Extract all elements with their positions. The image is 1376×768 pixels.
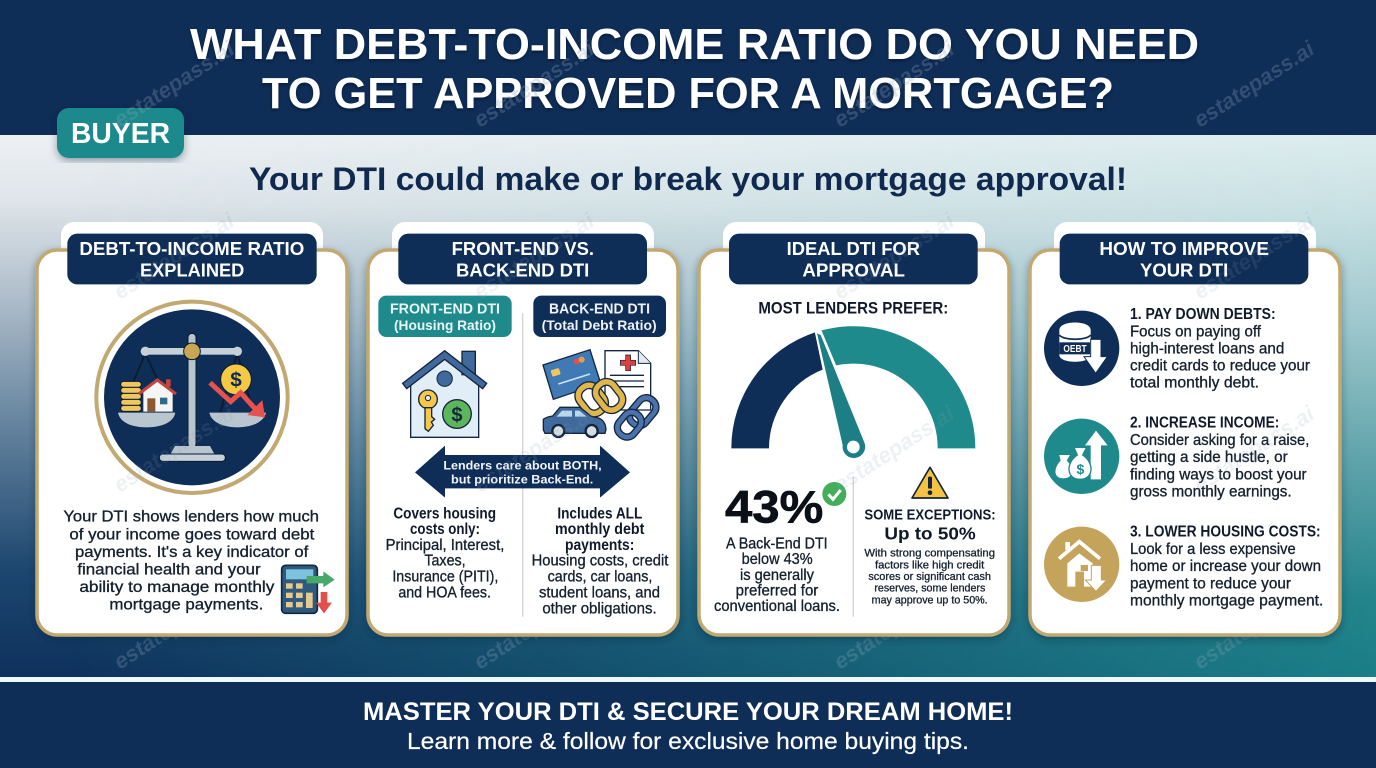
title — [190, 20, 1199, 118]
text: DTI description: payments. It's a key indicator of — [75, 544, 309, 561]
text: step 3: home or increase your down — [1130, 558, 1321, 575]
heading — [67, 234, 317, 284]
watermarks — [109, 35, 1319, 497]
text: 43% description: preferred for — [736, 583, 819, 600]
front-end badge — [378, 296, 512, 337]
watermarks: estatepass.ai — [1189, 207, 1319, 304]
text: 43% description — [714, 535, 840, 615]
heading: FRONT-END VS. — [452, 238, 594, 259]
text: step 1: 1. PAY DOWN DEBTS: — [1130, 306, 1276, 323]
text: DTI description: mortgage payments. — [109, 596, 263, 613]
icon: increase income: $ — [1076, 461, 1084, 477]
heading: APPROVAL — [802, 259, 905, 280]
stat: 43%: 43% — [725, 482, 823, 533]
subtitle: Your DTI could make or break your mortgage approval! — [249, 161, 1127, 197]
front-end badge: (Housing Ratio) — [394, 317, 496, 333]
icon: calculator — [282, 565, 335, 613]
text: front-end covers: costs only: — [410, 521, 480, 538]
text: back-end includes: Housing costs, credit — [532, 553, 669, 570]
watermarks: estatepass.ai — [829, 207, 959, 304]
text: exceptions: scores or significant cash — [868, 571, 991, 583]
icon: house with key and coin: $ — [451, 404, 463, 426]
watermarks: estatepass.ai — [109, 400, 239, 497]
text: DTI description — [63, 509, 319, 613]
footer text: Learn more & follow for exclusive home buying tips. — [407, 728, 969, 754]
icon: house with key and coin — [403, 351, 487, 437]
watermarks: estatepass.ai — [1189, 400, 1319, 497]
text: back-end includes: payments: — [565, 537, 634, 554]
text: front-end covers: Covers housing — [393, 505, 496, 522]
icon: increase income — [1044, 419, 1119, 494]
heading — [398, 234, 647, 284]
heading: DEBT-TO-INCOME RATIO — [79, 238, 304, 259]
text: 43% description: A Back-End DTI — [726, 535, 828, 552]
watermarks behind cards: estatepass.ai — [829, 577, 959, 674]
panel: how to improve your dti — [1030, 222, 1340, 635]
text: exceptions: may approve up to 50%. — [872, 594, 988, 606]
text: exceptions: Up to 50% — [884, 523, 976, 543]
text: DTI description: financial health and your — [77, 561, 261, 578]
footer heading: MASTER YOUR DTI & SECURE YOUR DREAM HOME! — [363, 698, 1013, 726]
text: exceptions: With strong compensating — [864, 548, 995, 560]
text: step 2 — [1130, 415, 1309, 500]
watermarks: estatepass.ai — [469, 35, 599, 132]
text: step 2: getting a side hustle, or — [1130, 449, 1288, 466]
back-end badge — [533, 296, 666, 337]
heading: EXPLAINED — [140, 259, 244, 280]
text: exceptions: factors like high credit — [875, 559, 984, 571]
arrow: lenders care about both: but prioritize Back-End. — [451, 472, 593, 486]
text: exceptions: reserves, some lenders — [874, 583, 986, 595]
heading: HOW TO IMPROVE — [1099, 238, 1269, 259]
watermarks: estatepass.ai — [829, 35, 959, 132]
text: exceptions — [864, 507, 996, 606]
text: step 2: Consider asking for a raise, — [1130, 432, 1309, 449]
text: step 2: 2. INCREASE INCOME: — [1130, 415, 1279, 432]
back-end badge: (Total Debt Ratio) — [542, 317, 657, 333]
heading: BACK-END DTI — [456, 259, 589, 280]
text: front-end covers: Taxes, — [424, 553, 466, 570]
text: front-end covers: and HOA fees. — [398, 584, 491, 601]
text: front-end covers: Insurance (PITI), — [392, 569, 498, 586]
text: back-end includes: student loans, and — [539, 584, 660, 601]
heading — [1060, 234, 1308, 284]
icon: balance scale: $ — [230, 369, 242, 392]
text: step 3: 3. LOWER HOUSING COSTS: — [1130, 524, 1321, 541]
text: DTI description: of your income goes toward debt — [69, 526, 315, 543]
text: step 1: credit cards to reduce your — [1130, 358, 1311, 375]
watermarks: estatepass.ai — [469, 400, 599, 497]
text: step 1: high-interest loans and — [1130, 340, 1284, 357]
text: step 3: Look for a less expensive — [1130, 541, 1296, 558]
text: DTI description: ability to manage monthly — [79, 579, 274, 596]
icon: pay down debts — [1044, 311, 1119, 386]
watermarks behind cards: estatepass.ai — [109, 577, 239, 674]
panel: front-end vs back-end — [368, 222, 678, 635]
footer band — [0, 677, 1376, 768]
text: DTI description: Your DTI shows lenders how much — [63, 509, 319, 526]
front-end badge: FRONT-END DTI — [390, 301, 500, 317]
text: back-end includes: monthly debt — [555, 521, 645, 538]
icon: pay down debts: OEBT — [1063, 344, 1087, 355]
heading: IDEAL DTI FOR — [787, 238, 921, 259]
header band — [0, 0, 1376, 135]
panel: ideal dti for approval — [699, 222, 1009, 635]
watermarks: estatepass.ai — [1189, 35, 1319, 132]
title: TO GET APPROVED FOR A MORTGAGE? — [262, 69, 1114, 118]
text: front-end covers: Principal, Interest, — [386, 537, 504, 554]
watermarks: estatepass.ai — [109, 35, 239, 132]
text: 43% description: is generally — [740, 567, 814, 584]
text: 43% description: conventional loans. — [714, 598, 840, 615]
icon: debts cards car chains — [543, 350, 659, 441]
text: most lenders prefer: MOST LENDERS PREFER: — [758, 299, 948, 318]
buyer badge: BUYER — [71, 118, 170, 150]
text: front-end covers — [386, 505, 504, 601]
text: back-end includes: Includes ALL — [557, 505, 643, 522]
text: step 2: gross monthly earnings. — [1130, 483, 1292, 500]
title: WHAT DEBT-TO-INCOME RATIO DO YOU NEED — [190, 20, 1199, 69]
watermarks behind cards: estatepass.ai — [469, 577, 599, 674]
background gradient — [0, 135, 1376, 680]
gauge chart — [731, 326, 975, 458]
buyer badge — [57, 108, 184, 158]
arrow: lenders care about both: Lenders care about BOTH, — [443, 458, 602, 472]
text: exceptions: SOME EXCEPTIONS: — [864, 507, 996, 523]
text: step 2: finding ways to boost your — [1130, 466, 1307, 483]
watermarks behind cards: estatepass.ai — [1189, 577, 1319, 674]
heading — [729, 234, 978, 284]
text: 43% description: below 43% — [742, 551, 813, 568]
text: back-end includes — [532, 505, 669, 617]
icon: balance scale — [96, 302, 335, 613]
text: back-end includes: cards, car loans, — [548, 569, 652, 586]
heading: YOUR DTI — [1140, 259, 1228, 280]
watermarks: estatepass.ai — [469, 207, 599, 304]
text: step 1: Focus on paying off — [1130, 323, 1262, 340]
panel: debt-to-income ratio explained — [37, 222, 347, 635]
text: step 3 — [1130, 524, 1323, 609]
icon: lower housing costs — [1044, 527, 1119, 602]
text: step 3: monthly mortgage payment. — [1130, 592, 1323, 609]
watermarks: estatepass.ai — [109, 207, 239, 304]
watermarks: estatepass.ai — [829, 400, 959, 497]
text: step 1: total monthly debt. — [1130, 375, 1259, 392]
back-end badge: BACK-END DTI — [549, 301, 650, 317]
text: step 1 — [1130, 306, 1311, 392]
icon: warning triangle — [912, 467, 948, 498]
watermarks behind cards — [109, 577, 1319, 674]
arrow: lenders care about both — [415, 446, 630, 498]
text: back-end includes: other obligations. — [542, 600, 657, 617]
text: step 3: payment to reduce your — [1130, 575, 1292, 592]
